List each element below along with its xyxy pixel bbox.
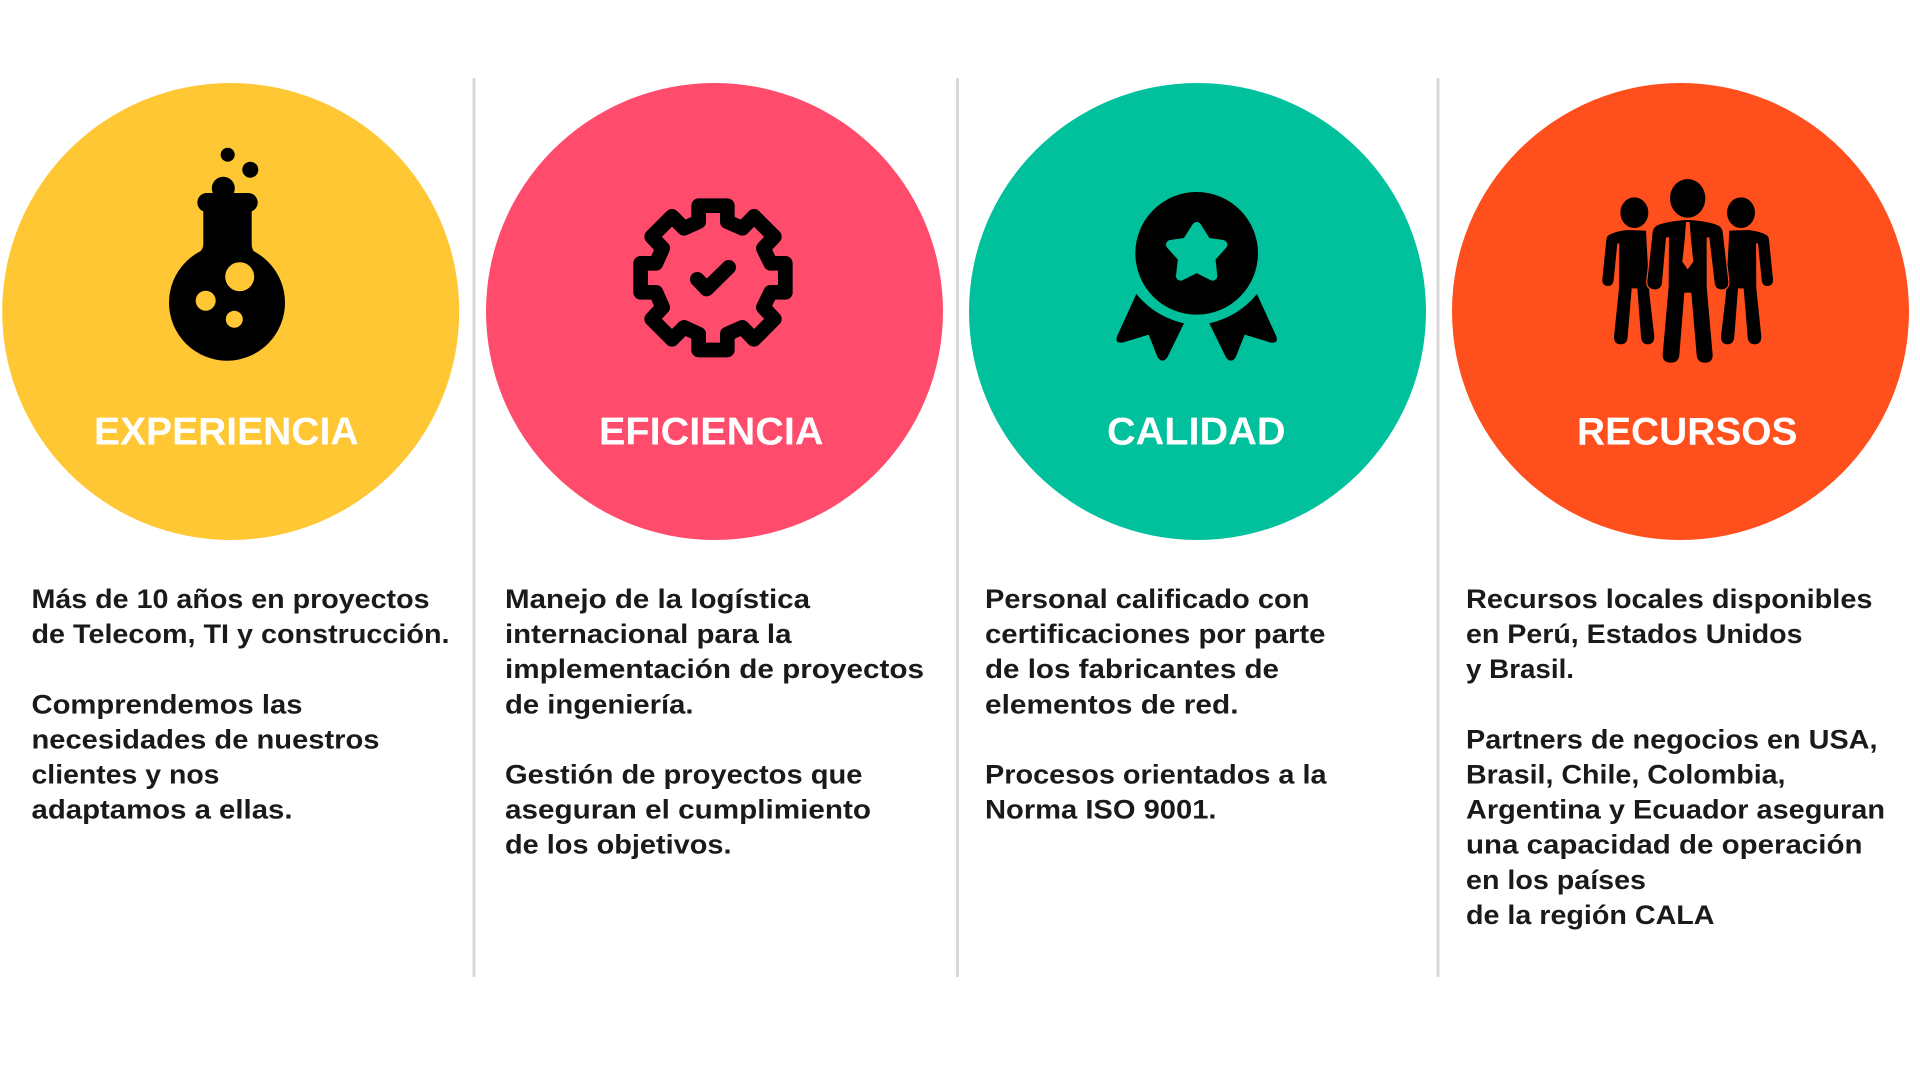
circle: calidad xyxy=(969,83,1426,540)
text block: experiencia: Más de 10 años en proyectos xyxy=(32,584,430,614)
text block: eficiencia xyxy=(505,584,924,860)
icon: award ribbon xyxy=(1116,192,1277,361)
text block: calidad: Procesos orientados a la xyxy=(985,760,1328,790)
text block: calidad: Norma ISO 9001. xyxy=(985,795,1216,825)
icon: gear with check xyxy=(641,206,785,350)
text block: recursos: Brasil, Chile, Colombia, xyxy=(1466,760,1786,790)
text block: calidad: certificaciones por parte xyxy=(985,619,1326,649)
text block: calidad: elementos de red. xyxy=(985,689,1238,719)
circle: experiencia xyxy=(2,83,459,540)
text block: eficiencia: implementación de proyectos xyxy=(505,654,924,684)
text block: eficiencia: aseguran el cumplimiento xyxy=(505,795,871,825)
icon: flask xyxy=(169,148,285,361)
icon: three people xyxy=(1602,179,1773,363)
text block: recursos: Recursos locales disponibles xyxy=(1466,584,1872,614)
heading: experiencia: EXPERIENCIA xyxy=(94,410,358,454)
panel: eficiencia xyxy=(486,83,943,860)
text block: experiencia: de Telecom, TI y construcción. xyxy=(32,619,450,649)
text block: eficiencia: Manejo de la logística xyxy=(505,584,811,614)
text block: experiencia: necesidades de nuestros xyxy=(32,724,380,754)
panel: recursos xyxy=(1452,83,1909,930)
text block: recursos: una capacidad de operación xyxy=(1466,830,1862,860)
text block: calidad xyxy=(985,584,1328,825)
text block: recursos: y Brasil. xyxy=(1466,654,1574,684)
text block: eficiencia: de ingeniería. xyxy=(505,689,694,719)
text block: eficiencia: Gestión de proyectos que xyxy=(505,760,862,790)
text block: experiencia: clientes y nos xyxy=(32,760,220,790)
heading: eficiencia: EFICIENCIA xyxy=(599,410,824,454)
text block: calidad: Personal calificado con xyxy=(985,584,1310,614)
text block: eficiencia: de los objetivos. xyxy=(505,830,732,860)
text block: experiencia: Comprendemos las xyxy=(32,689,302,719)
text block: recursos xyxy=(1466,584,1885,930)
text block: experiencia: adaptamos a ellas. xyxy=(32,795,292,825)
panel: experiencia xyxy=(2,83,459,825)
panel: calidad xyxy=(969,83,1426,825)
circle: eficiencia xyxy=(486,83,943,540)
text block: calidad: de los fabricantes de xyxy=(985,654,1279,684)
heading: calidad: CALIDAD xyxy=(1107,410,1286,454)
text block: experiencia xyxy=(32,584,450,825)
circle: recursos xyxy=(1452,83,1909,540)
text block: recursos: Argentina y Ecuador aseguran xyxy=(1466,795,1885,825)
text block: recursos: Partners de negocios en USA, xyxy=(1466,724,1878,754)
text block: recursos: de la región CALA xyxy=(1466,900,1714,930)
text block: recursos: en los países xyxy=(1466,865,1646,895)
heading: recursos: RECURSOS xyxy=(1577,410,1798,454)
text block: eficiencia: internacional para la xyxy=(505,619,793,649)
text block: recursos: en Perú, Estados Unidos xyxy=(1466,619,1802,649)
